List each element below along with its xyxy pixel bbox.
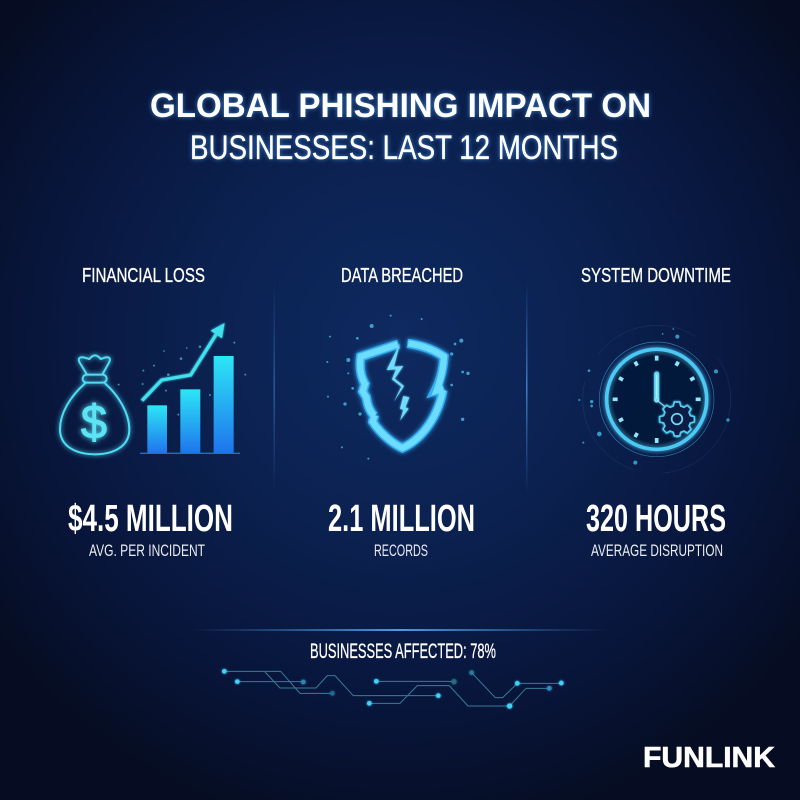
icon: clock with gear <box>578 325 731 473</box>
panel: data breached <box>326 265 475 560</box>
heading: system downtime: SYSTEM DOWNTIME <box>581 265 731 287</box>
footer stat: businesses affected: BUSINESSES AFFECTED: 78% <box>310 640 496 663</box>
chart: rising bars with arrow <box>118 323 246 454</box>
icon: cracked shield <box>326 315 470 460</box>
icon: dollar sign: $ <box>81 395 107 448</box>
title <box>150 87 651 167</box>
panel: system downtime <box>578 265 731 560</box>
logo: Funlink: FUNLINK <box>643 742 775 774</box>
icon: money bag <box>60 355 129 454</box>
title: BUSINESSES: LAST 12 MONTHS <box>190 129 618 167</box>
heading: data breached: DATA BREACHED <box>341 265 463 287</box>
panel: financial loss <box>60 265 246 560</box>
stat: downtime value: 320 HOURS <box>586 498 726 540</box>
title: GLOBAL PHISHING IMPACT ON <box>150 87 651 125</box>
caption: records: RECORDS <box>374 541 428 560</box>
circuit decoration <box>222 669 564 709</box>
stat: financial loss value: $4.5 MILLION <box>68 498 233 540</box>
heading: financial loss: FINANCIAL LOSS <box>82 265 205 287</box>
stat: data breached value: 2.1 MILLION <box>328 498 475 540</box>
caption: average disruption: AVERAGE DISRUPTION <box>591 541 723 560</box>
caption: per incident: AVG. PER INCIDENT <box>89 541 205 560</box>
